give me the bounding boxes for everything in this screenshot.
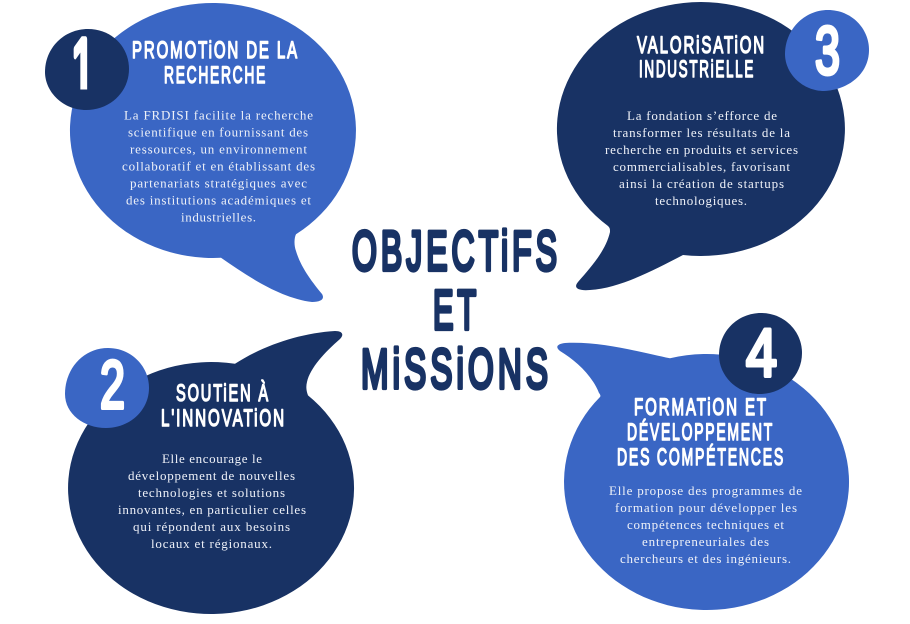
- body text 4: entrepreneuriales des: [642, 534, 769, 549]
- heading 3: INDUSTRiELLE: [639, 56, 755, 83]
- heading 4: [617, 394, 785, 471]
- heading 3: VALORiSATiON: [637, 32, 766, 59]
- body text 2: qui répondent aux besoins: [133, 519, 290, 534]
- speech bubble 1: [70, 3, 356, 302]
- number badge 3: 3: [815, 13, 840, 89]
- heading 2: SOUTiEN À: [176, 380, 270, 407]
- heading 2: [161, 380, 286, 432]
- body text 2: développement de nouvelles: [128, 468, 295, 483]
- body text 3: [605, 108, 798, 208]
- body text 1: scientifique en fournissant des: [128, 124, 308, 140]
- body text 4: Elle propose des programmes de: [609, 483, 802, 498]
- body text 3: commercialisables, favorisant: [613, 159, 790, 174]
- body text 1: ressources, un environnement: [130, 142, 307, 156]
- body text 4: [609, 483, 802, 566]
- number badge 2: [65, 347, 149, 428]
- heading 4: FORMATiON ET: [634, 394, 768, 421]
- number badge 4: 4: [746, 315, 777, 391]
- panel: formation et développement des compétences: [557, 313, 849, 610]
- heading 4: DÉVELOPPEMENT: [627, 419, 774, 446]
- number badge 1: 1: [71, 20, 95, 119]
- title: objectifs et missions: MiSSiONS: [361, 337, 552, 400]
- heading 1: PROMOTiON DE LA: [132, 37, 299, 64]
- heading 1: [132, 37, 299, 89]
- title: objectifs et missions: OBJECTiFS: [352, 219, 561, 282]
- body text 1: partenariats stratégiques avec: [130, 176, 307, 190]
- body text 1: des institutions académiques et: [126, 192, 311, 208]
- body text 4: compétences techniques et: [627, 517, 784, 532]
- number badge 2: 2: [100, 347, 125, 423]
- body text 2: [118, 451, 306, 551]
- speech bubble 2: [68, 331, 354, 614]
- heading 4: DES COMPÉTENCES: [617, 444, 785, 471]
- title: objectifs et missions: [352, 219, 561, 400]
- body text 4: formation pour développer les: [615, 500, 797, 515]
- number badge 3: [785, 10, 869, 91]
- speech bubble 4: [557, 343, 849, 610]
- panel: valorisation industrielle: [557, 2, 869, 290]
- body text 3: technologiques.: [655, 193, 747, 208]
- body text 2: technologies et solutions: [138, 485, 285, 500]
- heading 1: RECHERCHE: [164, 62, 267, 89]
- body text 1: industrielles.: [181, 210, 256, 224]
- body text 3: transformer les résultats de la: [613, 125, 790, 140]
- body text 2: innovantes, en particulier celles: [118, 502, 306, 517]
- body text 1: La FRDISI facilite la recherche: [124, 108, 313, 122]
- heading 2: L'INNOVATiON: [161, 405, 286, 432]
- title: objectifs et missions: ET: [433, 278, 480, 341]
- body text 3: La fondation s’efforce de: [627, 108, 777, 123]
- body text 2: Elle encourage le: [162, 451, 262, 466]
- body text 3: recherche en produits et services: [605, 142, 798, 157]
- panel: soutien à l'innovation: [65, 331, 354, 614]
- panel: promotion de la recherche: [45, 3, 356, 302]
- number badge 4: [719, 313, 802, 394]
- body text 2: locaux et régionaux.: [151, 536, 272, 551]
- body text 1: collaboratif et en établissant des: [122, 158, 315, 174]
- body text 3: ainsi la création de startups: [619, 176, 784, 191]
- speech bubble 3: [557, 2, 845, 290]
- body text 1: [122, 108, 315, 224]
- heading 3: [637, 32, 766, 83]
- number badge 1: [45, 29, 129, 110]
- body text 4: chercheurs et des ingénieurs.: [620, 551, 791, 566]
